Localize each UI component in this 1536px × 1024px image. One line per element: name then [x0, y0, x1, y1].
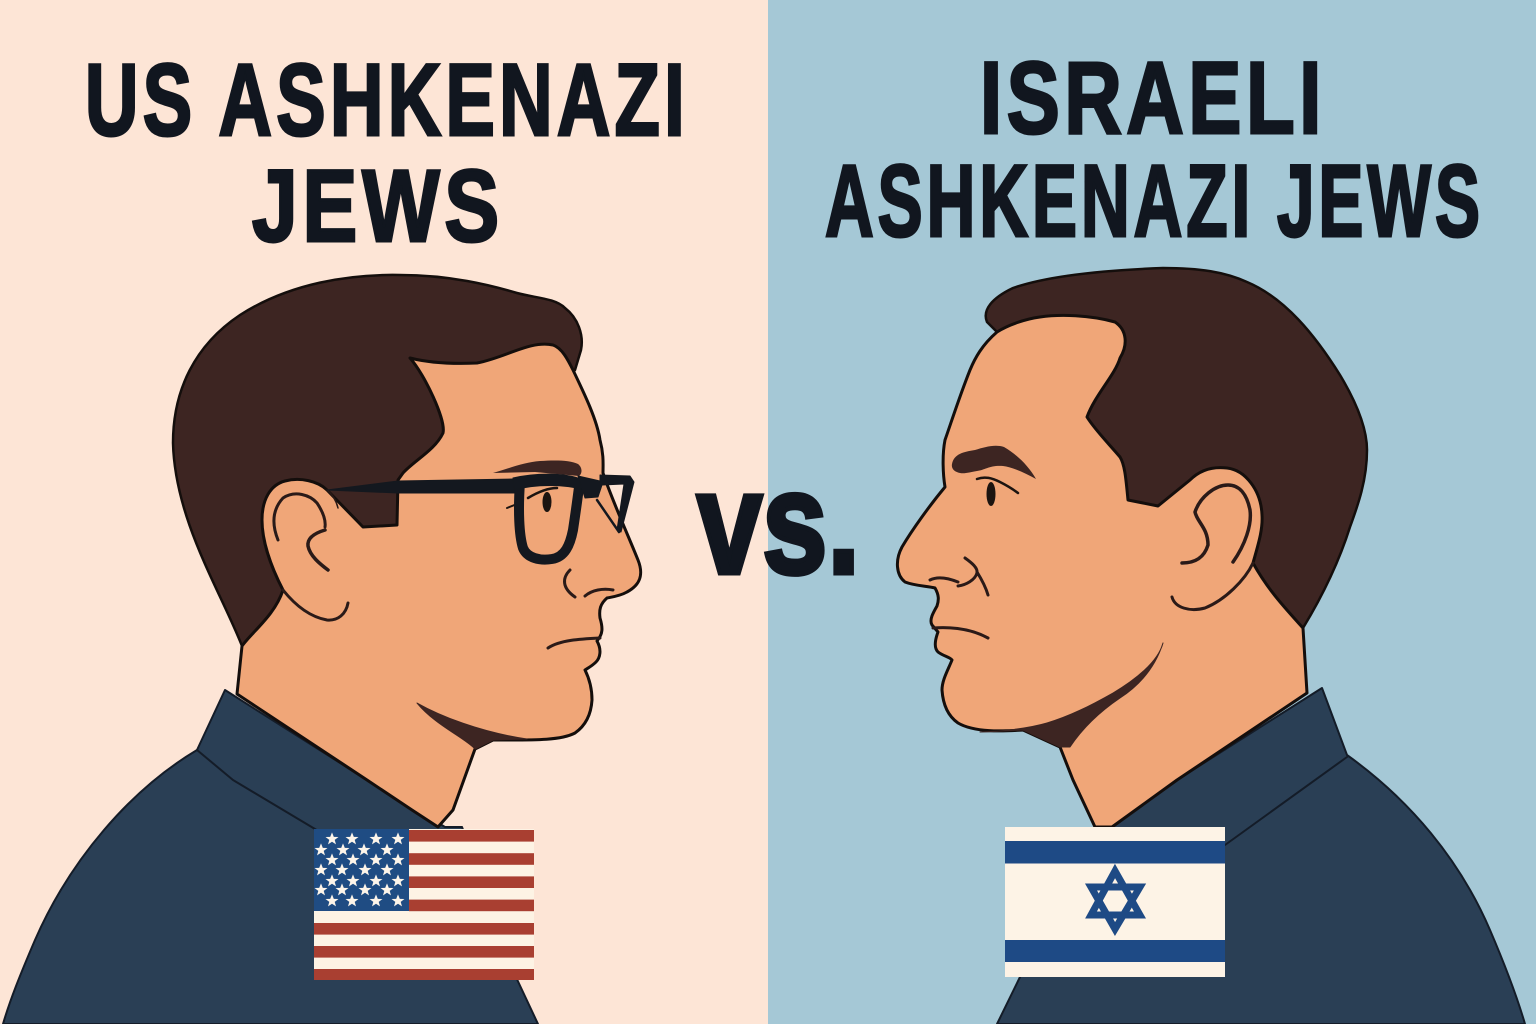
right figure eyebrow — [952, 446, 1036, 479]
left figure face and neck — [237, 344, 641, 827]
vs. label: vs. — [697, 441, 860, 604]
left figure collar line — [197, 750, 320, 832]
figure: US man in profile with glasses — [3, 275, 641, 1024]
right figure hair — [986, 268, 1367, 628]
heading: US Ashkenazi Jews — [85, 43, 689, 263]
icon: Israeli flag — [1005, 827, 1225, 977]
figure: Israeli man in profile — [897, 268, 1525, 1024]
heading: US Ashkenazi Jews: JEWS — [252, 149, 504, 263]
left figure eye — [507, 488, 557, 512]
left figure jaw shadow — [417, 703, 527, 749]
left figure glasses — [327, 474, 634, 560]
right figure eye — [977, 478, 1018, 506]
right figure nose and mouth lines — [930, 558, 988, 638]
left figure hair — [173, 275, 582, 646]
panel: right background — [768, 0, 1536, 1024]
right figure shirt — [997, 688, 1525, 1024]
heading: Israeli Ashkenazi Jews: ISRAELI — [980, 41, 1326, 155]
left figure nose and mouth lines — [548, 570, 613, 648]
left figure eyebrow — [493, 460, 582, 476]
right figure ear details — [1172, 485, 1253, 610]
left figure shirt — [3, 690, 538, 1024]
icon: US flag — [314, 829, 534, 980]
right figure collar line — [1225, 757, 1347, 845]
heading: US Ashkenazi Jews: US ASHKENAZI — [85, 43, 689, 157]
heading: Israeli Ashkenazi Jews — [825, 41, 1484, 258]
right figure jaw shadow — [980, 643, 1163, 747]
right figure face and neck — [897, 315, 1307, 827]
left figure ear details — [274, 490, 348, 620]
panel: left background — [0, 0, 768, 1024]
